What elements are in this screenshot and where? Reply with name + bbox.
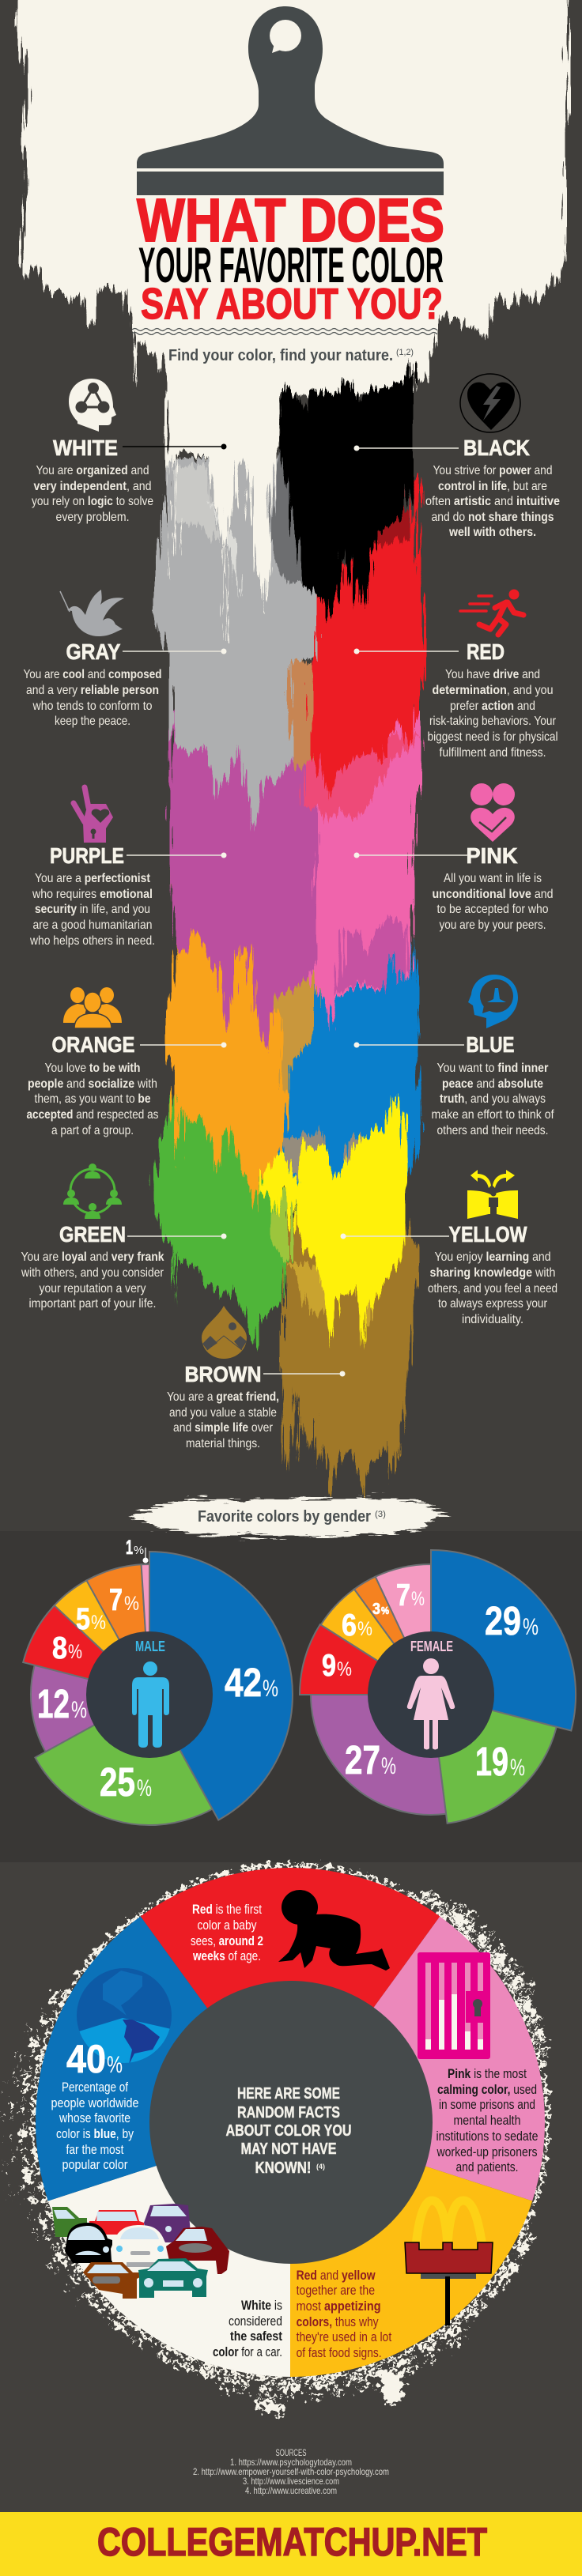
heading: favorite colors by gender: (3)	[375, 1510, 386, 1519]
description: individuality.	[462, 1313, 523, 1326]
chart: female pie	[300, 1550, 576, 1824]
paint: cream background and white stroke	[17, 0, 569, 614]
blue fact text: whose favorite	[59, 2110, 130, 2125]
paint: dark red blend	[378, 510, 411, 549]
description	[428, 1250, 557, 1326]
car: black	[65, 2223, 112, 2263]
label: YELLOW	[449, 1222, 527, 1247]
paint: orange-tan blend	[270, 945, 316, 1091]
icon: circle of people	[63, 1164, 122, 1219]
car: purple	[144, 2204, 191, 2242]
male percentages: %	[71, 1697, 87, 1723]
icon: traffic of cars	[52, 2204, 229, 2299]
wedge: male yellow 5%	[55, 1580, 149, 1695]
description: control in life, but are	[438, 480, 547, 493]
background: facts section	[0, 1862, 582, 2512]
description: security in life, and you	[35, 903, 150, 916]
label: RED	[467, 639, 505, 664]
icon: group of people	[63, 987, 122, 1028]
wedge: female pink 7%	[376, 1564, 431, 1695]
wedge: white fact	[48, 2122, 290, 2377]
pink fact text	[436, 2066, 538, 2174]
description	[432, 1062, 554, 1137]
paint: tan blend	[289, 660, 312, 771]
wedge: male purple 12%	[31, 1665, 149, 1752]
description: others, and you feel a need	[428, 1282, 557, 1296]
sources: 4. http://www.ucreative.com	[245, 2485, 337, 2496]
pink fact text: Pink is the most	[448, 2066, 527, 2081]
description: them, as you want to be	[35, 1092, 151, 1106]
description: and a very reliable person	[26, 684, 159, 697]
label: PURPLE	[50, 843, 124, 868]
description	[27, 1062, 158, 1137]
female percentages: 7	[396, 1578, 410, 1612]
callout line	[354, 1042, 464, 1048]
pink fact text: calming color, used	[437, 2082, 537, 2097]
icon: okay hand with heart lock	[74, 787, 113, 843]
male percentages: 42	[225, 1660, 262, 1705]
description: You are a great friend,	[167, 1390, 279, 1404]
car: green	[52, 2207, 87, 2237]
wedge: male pink 1%	[142, 1564, 149, 1695]
red fact text	[191, 1902, 263, 1963]
panel: gray	[24, 590, 226, 728]
red fact text: color a baby	[198, 1918, 257, 1933]
center heading: MAY NOT HAVE	[240, 2140, 337, 2158]
male percentages: 8	[52, 1631, 67, 1665]
label: ORANGE	[52, 1032, 134, 1057]
yellow fact text: colors, thus why	[297, 2314, 379, 2329]
description	[32, 464, 153, 524]
icon: broken heart	[460, 374, 520, 432]
icon: globe	[77, 1968, 172, 2063]
sources	[193, 2447, 389, 2496]
callout line	[354, 852, 468, 858]
description: You have drive and	[445, 668, 540, 681]
description	[427, 668, 558, 760]
panel: yellow	[340, 1170, 557, 1326]
description: to be accepted for who	[436, 903, 549, 916]
description: fulfillment and fitness.	[440, 746, 546, 760]
description: who helps others in need.	[29, 934, 155, 948]
paint: purple	[169, 711, 318, 1051]
male percentages: %	[137, 1775, 152, 1801]
panel: blue	[354, 975, 554, 1137]
callout line	[127, 1233, 226, 1239]
paint: tan yellow blend	[286, 1265, 372, 1328]
description: You enjoy learning and	[435, 1250, 550, 1264]
description: you are by your peers.	[440, 918, 546, 932]
paint: green	[152, 1091, 291, 1346]
description	[21, 1250, 164, 1311]
description	[167, 1390, 279, 1450]
description: keep the peace.	[55, 715, 130, 728]
female percentages: 19	[475, 1739, 508, 1784]
center heading: RANDOM FACTS	[237, 2104, 340, 2122]
car: teal	[138, 2258, 208, 2298]
female percentages: 27	[345, 1737, 380, 1782]
title	[137, 187, 444, 328]
description: risk-taking behaviors. Your	[429, 715, 557, 728]
male percentages: %	[134, 1544, 144, 1557]
description: well with others.	[448, 526, 536, 539]
male center disc	[86, 1631, 213, 1758]
paint: red	[307, 472, 425, 798]
panel: purple	[29, 787, 227, 948]
center heading: ABOUT COLOR YOU	[226, 2122, 351, 2140]
description: you rely on logic to solve	[32, 495, 153, 508]
blue fact text: far the most	[66, 2142, 124, 2157]
icon: two people heart	[471, 783, 515, 842]
description: You are organized and	[36, 464, 149, 477]
female percentages	[322, 1578, 539, 1784]
female percentages: 3	[372, 1601, 380, 1618]
car: dark red	[166, 2227, 229, 2274]
icon: open book with arrows	[467, 1170, 518, 1219]
white fact text: the safest	[230, 2329, 282, 2344]
description: prefer action and	[450, 700, 535, 713]
wedge: pink fact	[290, 1916, 545, 2201]
background: upper section	[0, 0, 582, 1531]
male label: MALE	[135, 1639, 165, 1654]
callout line	[140, 1042, 226, 1048]
paint: brown	[283, 1186, 419, 1496]
description: peace and absolute	[442, 1077, 543, 1091]
yellow fact text: they're used in a lot	[297, 2329, 391, 2344]
blue fact text: people worldwide	[51, 2095, 139, 2110]
label: PINK	[467, 843, 517, 868]
callout line	[123, 648, 226, 654]
male percentages: 1	[126, 1537, 133, 1559]
description: You want to find inner	[436, 1062, 549, 1075]
paint: purple overlay on pink	[336, 915, 410, 994]
panel: white	[32, 379, 226, 524]
sources: SOURCES	[275, 2447, 307, 2458]
wedge: red fact	[141, 1868, 440, 2122]
blue fact text: popular color	[62, 2157, 128, 2172]
pink fact text: institutions to sedate	[436, 2129, 538, 2144]
callout line	[340, 1233, 449, 1239]
description: who requires emotional	[32, 888, 153, 901]
male percentages: %	[68, 1641, 82, 1663]
description: You strive for power and	[433, 464, 552, 477]
label: GRAY	[66, 639, 121, 664]
center heading: (4)	[316, 2163, 325, 2171]
title: SAY ABOUT YOU?	[141, 279, 443, 328]
wedge: male red 8%	[23, 1605, 149, 1695]
icon: male figure	[132, 1661, 169, 1748]
callout line	[354, 648, 459, 654]
male percentages: 7	[109, 1583, 123, 1617]
female center disc	[368, 1631, 494, 1758]
icon: running man	[460, 590, 523, 635]
paint: black	[278, 360, 414, 627]
footer: COLLEGEMATCHUP.NET	[97, 2520, 487, 2564]
description	[432, 872, 554, 932]
male percentages	[37, 1537, 278, 1805]
description: You are loyal and very frank	[21, 1250, 164, 1264]
female percentages: %	[357, 1618, 372, 1640]
paint: pink	[300, 711, 423, 1030]
white fact text	[213, 2298, 282, 2359]
description: often artistic and intuitive	[425, 495, 560, 508]
label: BLUE	[467, 1032, 514, 1057]
icon: crawling baby	[278, 1890, 390, 1971]
callout line	[127, 852, 226, 858]
yellow fact text: most appetizing	[297, 2299, 381, 2314]
pink fact text: worked-up prisoners	[436, 2144, 538, 2159]
description: very independent, and	[33, 480, 152, 493]
panel: black	[354, 374, 560, 539]
description: You love to be with	[44, 1062, 141, 1075]
male percentages: %	[124, 1593, 139, 1615]
label: BROWN	[185, 1362, 261, 1386]
pink fact text: mental health	[454, 2113, 520, 2128]
description: are a good humanitarian	[33, 918, 152, 932]
wedge: female red 9%	[300, 1624, 431, 1695]
icon: head with network	[69, 379, 116, 432]
icon: fast food sign	[405, 2201, 493, 2325]
heading: favorite colors by gender	[130, 1498, 449, 1537]
paint: thin drips	[168, 443, 225, 643]
description	[24, 668, 161, 728]
paint: blue-gray blend	[282, 1129, 356, 1186]
red fact text: sees, around 2	[191, 1933, 263, 1948]
label: GREEN	[59, 1222, 126, 1247]
sources: 2. http://www.empower-yourself-with-color-psychology.com	[193, 2466, 389, 2477]
description: unconditional love and	[432, 888, 554, 901]
description: material things.	[186, 1437, 260, 1450]
blue fact text: Percentage of	[62, 2080, 128, 2095]
panel: brown	[167, 1306, 345, 1450]
description: sharing knowledge with	[430, 1266, 555, 1280]
paint: mottled light gray	[169, 466, 220, 545]
female percentages: 9	[322, 1649, 336, 1683]
yellow fact text: Red and yellow	[297, 2268, 376, 2283]
paint: olive blend	[270, 1186, 291, 1265]
description	[29, 872, 155, 948]
heading: favorite colors by gender: Favorite colors by gender	[198, 1508, 371, 1526]
description: truth, and you always	[440, 1092, 546, 1106]
female percentages: %	[523, 1614, 539, 1640]
description: every problem.	[55, 511, 130, 524]
icon: dove	[60, 590, 124, 636]
paint: red-pink blend	[304, 735, 419, 824]
description: You are cool and composed	[24, 668, 161, 681]
female percentages: 29	[485, 1598, 521, 1643]
wedge: male blue 42%	[149, 1552, 293, 1820]
paint: yellow	[261, 1093, 406, 1349]
panel: orange	[27, 987, 226, 1137]
blue fact text: color is blue, by	[56, 2126, 134, 2141]
red fact text: weeks of age.	[192, 1948, 261, 1963]
chart: male pie	[23, 1552, 293, 1825]
sources: 1. https://www.psychologytoday.com	[230, 2457, 352, 2468]
description: make an effort to think of	[432, 1108, 554, 1122]
female label: FEMALE	[410, 1639, 453, 1654]
car: red	[89, 2210, 144, 2235]
blue fact text	[51, 2037, 139, 2172]
blue fact text: 40	[66, 2037, 106, 2081]
callout line	[354, 446, 459, 451]
icon: paintbrush	[137, 6, 444, 195]
female percentages: %	[381, 1605, 389, 1616]
male percentages: 5	[76, 1602, 90, 1636]
sources: 3. http://www.livescience.com	[243, 2476, 339, 2487]
male percentages: %	[263, 1676, 278, 1702]
description: All you want in life is	[444, 872, 542, 885]
center heading: KNOWN!	[255, 2159, 312, 2177]
description: You are a perfectionist	[35, 872, 151, 885]
icon: female figure	[407, 1658, 455, 1750]
red fact text: Red is the first	[192, 1902, 262, 1917]
female percentages: %	[337, 1658, 352, 1680]
yellow fact text	[297, 2268, 391, 2360]
description: important part of your life.	[28, 1297, 157, 1311]
description: people and socialize with	[28, 1077, 157, 1091]
icon: drop with mountains	[202, 1306, 247, 1359]
female percentages: 6	[342, 1609, 357, 1643]
female percentages: %	[411, 1588, 425, 1610]
chalk ring around facts wheel	[2, 1865, 547, 2419]
yellow fact text: together are the	[297, 2283, 375, 2298]
white fact text: color for a car.	[213, 2344, 282, 2359]
label: BLACK	[463, 436, 530, 460]
description: to always express your	[438, 1297, 548, 1311]
subtitle: Find your color, find your nature.	[168, 347, 393, 364]
panel: red	[354, 590, 558, 760]
car: white	[111, 2225, 168, 2267]
male percentages: 12	[37, 1681, 70, 1726]
description: and you value a stable	[169, 1406, 277, 1420]
chart: facts wheel	[36, 1868, 545, 2377]
description: with others, and you consider	[21, 1266, 164, 1280]
description	[425, 464, 560, 539]
paint: blue	[281, 941, 423, 1201]
paint: orange	[164, 869, 291, 1217]
blue fact text: %	[107, 2052, 123, 2078]
callout line	[263, 1371, 345, 1377]
description: a part of a group.	[51, 1124, 134, 1137]
description: biggest need is for physical	[427, 730, 558, 744]
wedge: female yellow 6%	[321, 1589, 431, 1695]
label: WHITE	[53, 436, 118, 460]
panel: pink	[354, 783, 554, 932]
subtitle: (1,2)	[396, 348, 414, 357]
icon: jail door	[418, 1952, 490, 2059]
description: and do not share things	[432, 511, 554, 524]
paint: mottled pale gray	[207, 498, 241, 601]
female percentages: %	[510, 1755, 525, 1781]
description: who tends to conform to	[32, 700, 153, 713]
paint strokes column	[17, 0, 569, 1496]
description: accepted and respected as	[27, 1108, 158, 1122]
white fact text: White is	[241, 2298, 282, 2313]
pink fact text: and patients.	[455, 2159, 519, 2174]
center disc	[149, 1981, 433, 2264]
wedge: female green 19%	[431, 1695, 557, 1824]
center heading: HERE ARE SOME	[237, 2085, 340, 2103]
yellow fact text: of fast food signs.	[297, 2345, 382, 2360]
title: WHAT DOES	[137, 187, 444, 255]
paint: gray	[152, 458, 316, 835]
pink fact text: in some prisons and	[439, 2097, 535, 2112]
wedge: female orange 3%	[354, 1577, 431, 1695]
female percentages: %	[381, 1753, 396, 1779]
panel: green	[21, 1164, 227, 1311]
white fact text: considered	[229, 2314, 282, 2329]
callout line	[123, 444, 226, 449]
wedge: female purple 27%	[311, 1695, 446, 1815]
male percentages: 25	[100, 1759, 135, 1805]
description: and simple life over	[173, 1421, 274, 1435]
wedge: yellow fact	[290, 2122, 532, 2377]
description: others and their needs.	[436, 1124, 549, 1137]
wedge: male green 25%	[35, 1695, 213, 1825]
description: your reputation a very	[40, 1282, 146, 1296]
footer	[0, 2512, 582, 2576]
male percentages: %	[91, 1612, 106, 1634]
wedge: male orange 7%	[87, 1564, 149, 1695]
wedge: female blue 29%	[431, 1550, 576, 1731]
paint: dark gray	[270, 447, 306, 583]
wedge: blue fact	[36, 1916, 290, 2201]
center heading	[226, 2085, 351, 2177]
background: gender section	[0, 1531, 582, 1862]
description: determination, and you	[432, 684, 554, 697]
car: brown	[83, 2262, 140, 2299]
icon: head with speech bubble	[468, 975, 518, 1028]
